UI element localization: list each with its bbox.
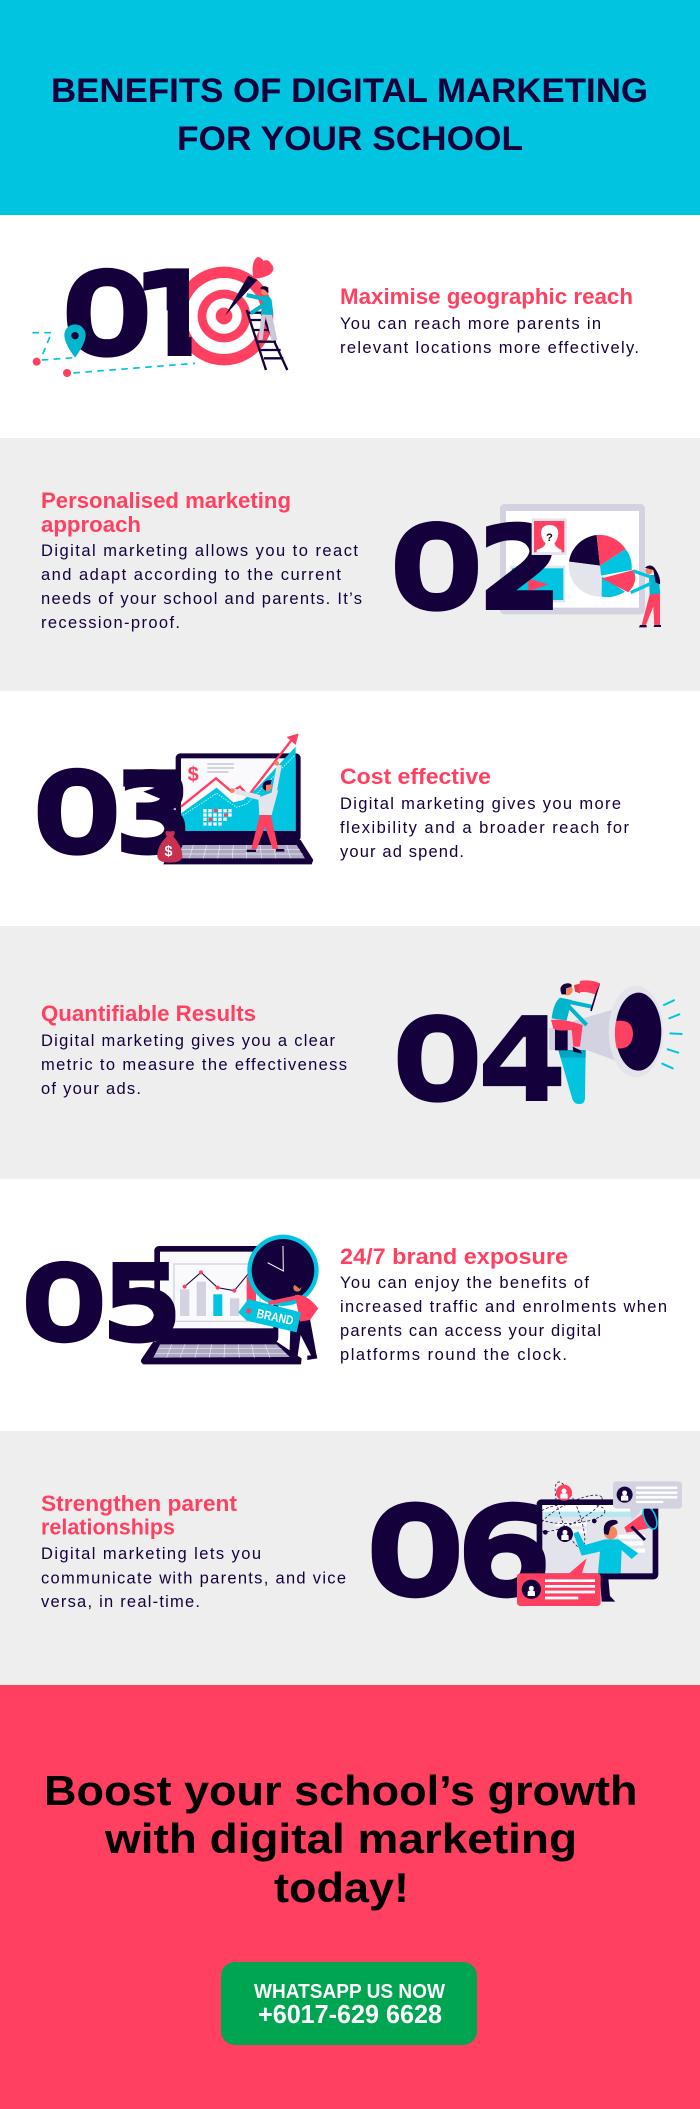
illustration: 03 laptop with growth chart: [30, 733, 313, 879]
illustration: 05 laptop with clock and brand tag: 0: [19, 1244, 109, 1365]
body text: [340, 1274, 667, 1364]
illustration: 01 target and ladder: [32, 248, 287, 381]
illustration: 04 man on megaphone: [390, 980, 682, 1126]
panel: 04 quantifiable results: [0, 926, 700, 1179]
illustration: 02 board with pie chart: 0: [387, 502, 486, 636]
panel: 03 cost effective: [0, 691, 700, 926]
heading: Maximise geographic reach: [340, 284, 633, 309]
body text: Digital marketing gives you a clear: [41, 1032, 336, 1050]
whatsapp button: +6017-629 6628: [258, 1999, 442, 2029]
body text: Digital marketing gives you more: [340, 795, 621, 813]
body text: and adapt according to the current: [41, 566, 341, 584]
illustration: 05 laptop with clock and brand tag: 5: [98, 1243, 185, 1365]
heading: relationships: [41, 1514, 175, 1540]
call-to-action headline: with digital marketing: [104, 1815, 577, 1862]
body text: [340, 795, 630, 861]
illustration: 03 laptop with growth chart: 3: [112, 751, 196, 879]
body text: increased traffic and enrolments when: [340, 1298, 667, 1316]
panel: 01 maximise geographic reach: [32, 257, 638, 377]
panel: 05 24/7 brand exposure: [0, 1179, 700, 1431]
heading: approach: [41, 512, 141, 537]
illustration: 04 man on megaphone: 0: [390, 996, 485, 1126]
heading: [41, 488, 291, 537]
body text: needs of your school and parents. It’s: [41, 590, 362, 608]
body text: [41, 1545, 346, 1611]
body text: of your ads.: [41, 1080, 141, 1098]
illustration: 02 board with pie chart: [387, 502, 661, 636]
illustration: 02 board with pie chart: ?: [546, 532, 553, 544]
call-to-action headline: Boost your school’s growth: [44, 1767, 638, 1814]
body text: Digital marketing lets you: [41, 1545, 261, 1563]
heading: Quantifiable Results: [41, 1001, 256, 1026]
illustration: 02 board with pie chart: 2: [475, 503, 565, 635]
illustration: 01 target and ladder: 0: [59, 249, 155, 381]
body text: You can reach more parents in: [340, 315, 601, 333]
body text: Digital marketing allows you to react: [41, 542, 358, 560]
title: BENEFITS OF DIGITAL MARKETING: [51, 72, 648, 110]
body text: communicate with parents, and vice: [41, 1570, 346, 1588]
call-to-action headline: [44, 1767, 638, 1911]
heading: 24/7 brand exposure: [340, 1244, 568, 1269]
heading: Cost effective: [340, 764, 491, 789]
heading: [41, 1491, 238, 1540]
body text: versa, in real-time.: [41, 1593, 200, 1611]
panel: 06 strengthen parent relationships: [0, 1431, 700, 1685]
body text: parents can access your digital: [340, 1322, 601, 1340]
title: [51, 72, 648, 158]
illustration: 06 monitor with speaker and chat bubbles: 6: [454, 1481, 554, 1624]
illustration: 06 monitor with speaker and chat bubbles: [364, 1479, 682, 1624]
illustration: 03 laptop with growth chart: $: [164, 844, 172, 860]
heading: Personalised marketing: [41, 488, 291, 513]
panel: 02 personalised marketing approach: [0, 438, 700, 691]
body text: your ad spend.: [340, 843, 464, 861]
whatsapp button: [221, 1962, 477, 2045]
body text: [41, 1032, 347, 1098]
illustration: 04 man on megaphone: 4: [476, 995, 568, 1125]
illustration: 06 monitor with speaker and chat bubbles: 0: [364, 1482, 467, 1624]
title: FOR YOUR SCHOOL: [177, 120, 523, 158]
illustration: 05 laptop with clock and brand tag: BRAND: [255, 1307, 295, 1328]
body text: relevant locations more effectively.: [340, 339, 639, 357]
illustration: 03 laptop with growth chart: $: [188, 764, 199, 786]
body text: metric to measure the effectiveness: [41, 1056, 347, 1074]
whatsapp button: WHATSAPP US NOW: [254, 1981, 445, 2003]
illustration: 01 target and ladder: 1: [127, 248, 222, 381]
header banner: [0, 0, 700, 215]
body text: You can enjoy the benefits of: [340, 1274, 589, 1292]
body text: [41, 542, 362, 632]
heading: Strengthen parent: [41, 1491, 238, 1516]
body text: [340, 315, 639, 357]
illustration: 03 laptop with growth chart: 0: [30, 750, 124, 879]
call-to-action headline: today!: [274, 1864, 409, 1911]
illustration: 05 laptop with clock and brand tag: [19, 1235, 319, 1365]
body text: flexibility and a broader reach for: [340, 819, 630, 837]
body text: recession-proof.: [41, 614, 180, 632]
panel: call to action: [0, 1685, 700, 2109]
body text: platforms round the clock.: [340, 1346, 567, 1364]
